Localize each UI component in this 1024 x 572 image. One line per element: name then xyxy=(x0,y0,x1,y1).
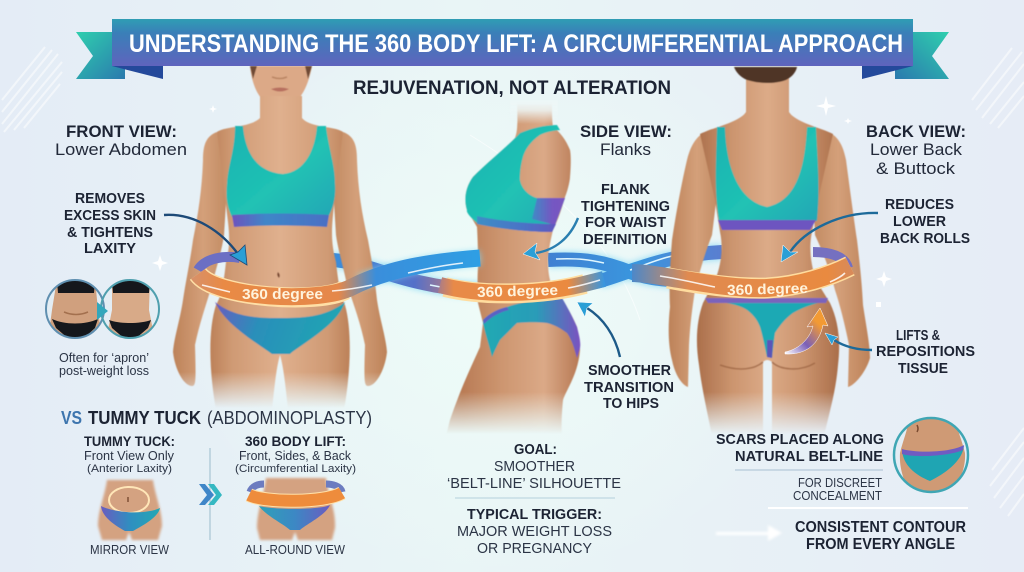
callout: reduces rolls: REDUCES xyxy=(885,197,954,213)
scars text: CONCEALMENT xyxy=(793,489,882,503)
divider and chevrons xyxy=(199,448,222,540)
callout: reduces rolls xyxy=(880,197,970,247)
callout: lifts tissue: LIFTS & xyxy=(896,328,940,344)
arrow: lifts tissue xyxy=(825,333,872,350)
side briefs xyxy=(483,298,580,358)
callout: lifts tissue: TISSUE xyxy=(898,361,948,377)
label: front view: FRONT VIEW: xyxy=(66,122,177,141)
callout: flank tightening xyxy=(581,182,670,248)
comparison: 360 body lift: Front, Sides, & Back xyxy=(239,449,352,463)
callout: flank tightening: FLANK xyxy=(601,182,651,198)
comparison: 360 body lift: ALL-ROUND VIEW xyxy=(245,543,345,557)
label: front view xyxy=(55,122,187,159)
heading: vs tummy tuck: TUMMY TUCK xyxy=(88,408,201,428)
label: side view: SIDE VIEW: xyxy=(580,122,672,141)
comparison: tummy tuck: Front View Only xyxy=(84,449,175,463)
ribbon: rear strands xyxy=(333,252,722,290)
arrow: reduces lower back rolls xyxy=(781,213,878,262)
heading: vs tummy tuck xyxy=(61,408,372,428)
label: back view: & Buttock xyxy=(876,159,956,178)
comparison: 360 body lift xyxy=(235,434,356,557)
typical trigger block: MAJOR WEIGHT LOSS xyxy=(457,523,612,540)
goal block: ‘BELT-LINE’ SILHOUETTE xyxy=(447,475,621,492)
callout: lifts tissue xyxy=(876,328,975,377)
subtitle: REJUVENATION, NOT ALTERATION xyxy=(353,78,671,99)
goal block: SMOOTHER xyxy=(494,458,575,475)
side bra xyxy=(465,125,565,232)
comparison: tummy tuck: TUMMY TUCK: xyxy=(84,434,175,449)
label: back view: BACK VIEW: xyxy=(866,122,966,141)
callout: reduces rolls: LOWER xyxy=(893,214,947,230)
before and after circles xyxy=(46,279,159,340)
back briefs xyxy=(727,302,818,358)
typical trigger block: OR PREGNANCY xyxy=(477,540,592,557)
closing statement: FROM EVERY ANGLE xyxy=(806,536,955,553)
figure: side view xyxy=(446,100,580,436)
front bra xyxy=(227,126,335,227)
ribbon: 360 degree band: 360 degree xyxy=(727,281,808,299)
back bra xyxy=(716,127,819,230)
label: side view xyxy=(580,122,672,159)
goal block: GOAL: xyxy=(514,442,557,458)
comparison: 360 body lift: 360 BODY LIFT: xyxy=(245,434,346,449)
heading: vs tummy tuck: (ABDOMINOPLASTY) xyxy=(207,408,372,428)
arrow: smoother transition xyxy=(577,302,620,357)
callout: smoother transition: TRANSITION xyxy=(584,380,674,396)
typical trigger block: TYPICAL TRIGGER: xyxy=(467,507,602,523)
arrow: flank tightening xyxy=(523,218,578,260)
caption: apron: Often for ‘apron’ xyxy=(59,351,149,365)
comparison: tummy tuck: (Anterior Laxity) xyxy=(87,463,172,475)
scars text: SCARS PLACED ALONG xyxy=(716,431,884,448)
callout: removes excess skin: REMOVES xyxy=(75,191,145,207)
callout: smoother transition: TO HIPS xyxy=(603,396,659,412)
scars text: FOR DISCREET xyxy=(798,476,882,490)
callout: removes excess skin: & TIGHTENS xyxy=(67,225,153,241)
callout: lifts tissue: REPOSITIONS xyxy=(876,344,975,360)
label: side view: Flanks xyxy=(600,140,651,159)
caption: apron xyxy=(59,351,149,378)
arrow: removes excess skin xyxy=(164,215,247,265)
ribbon: 360 degree band xyxy=(198,252,850,303)
label: back view xyxy=(866,122,966,178)
arrow: orange lift xyxy=(785,308,828,354)
figure: front view xyxy=(173,66,387,410)
figure: back view xyxy=(669,67,870,436)
comparison: 360 body lift: (Circumferential Laxity) xyxy=(235,463,356,475)
arrow: white xyxy=(716,525,782,541)
typical trigger block xyxy=(457,507,612,557)
caption: apron: post-weight loss xyxy=(59,364,149,378)
callout: removes excess skin xyxy=(64,191,156,257)
divider line xyxy=(768,507,968,509)
scars text: NATURAL BELT-LINE xyxy=(735,448,883,465)
callout: smoother transition: SMOOTHER xyxy=(588,363,672,379)
ribbon: 360 degree band: 360 degree xyxy=(242,287,323,303)
callout: smoother transition xyxy=(584,363,674,412)
comparison: tummy tuck xyxy=(84,434,175,557)
front briefs xyxy=(215,302,345,354)
callout: removes excess skin: EXCESS SKIN xyxy=(64,208,156,224)
callout: flank tightening: FOR WAIST xyxy=(585,215,666,231)
callout: reduces rolls: BACK ROLLS xyxy=(880,231,970,247)
label: front view: Lower Abdomen xyxy=(55,140,187,159)
callout: flank tightening: TIGHTENING xyxy=(581,199,670,215)
callout: removes excess skin: LAXITY xyxy=(84,241,136,257)
scar circle photo xyxy=(893,417,969,493)
closing statement xyxy=(795,519,966,553)
goal block xyxy=(447,442,621,492)
heading: vs tummy tuck: VS xyxy=(61,408,82,428)
scars text xyxy=(716,431,884,503)
title banner: UNDERSTANDING THE 360 BODY LIFT: A CIRCUMFERENTIAL APPROACH xyxy=(129,30,903,58)
closing statement: CONSISTENT CONTOUR xyxy=(795,519,966,536)
title banner xyxy=(76,19,949,79)
ribbon: 360 degree band: 360 degree xyxy=(477,283,558,301)
comparison: tummy tuck: MIRROR VIEW xyxy=(90,543,169,557)
label: back view: Lower Back xyxy=(870,140,963,159)
callout: flank tightening: DEFINITION xyxy=(583,232,667,248)
